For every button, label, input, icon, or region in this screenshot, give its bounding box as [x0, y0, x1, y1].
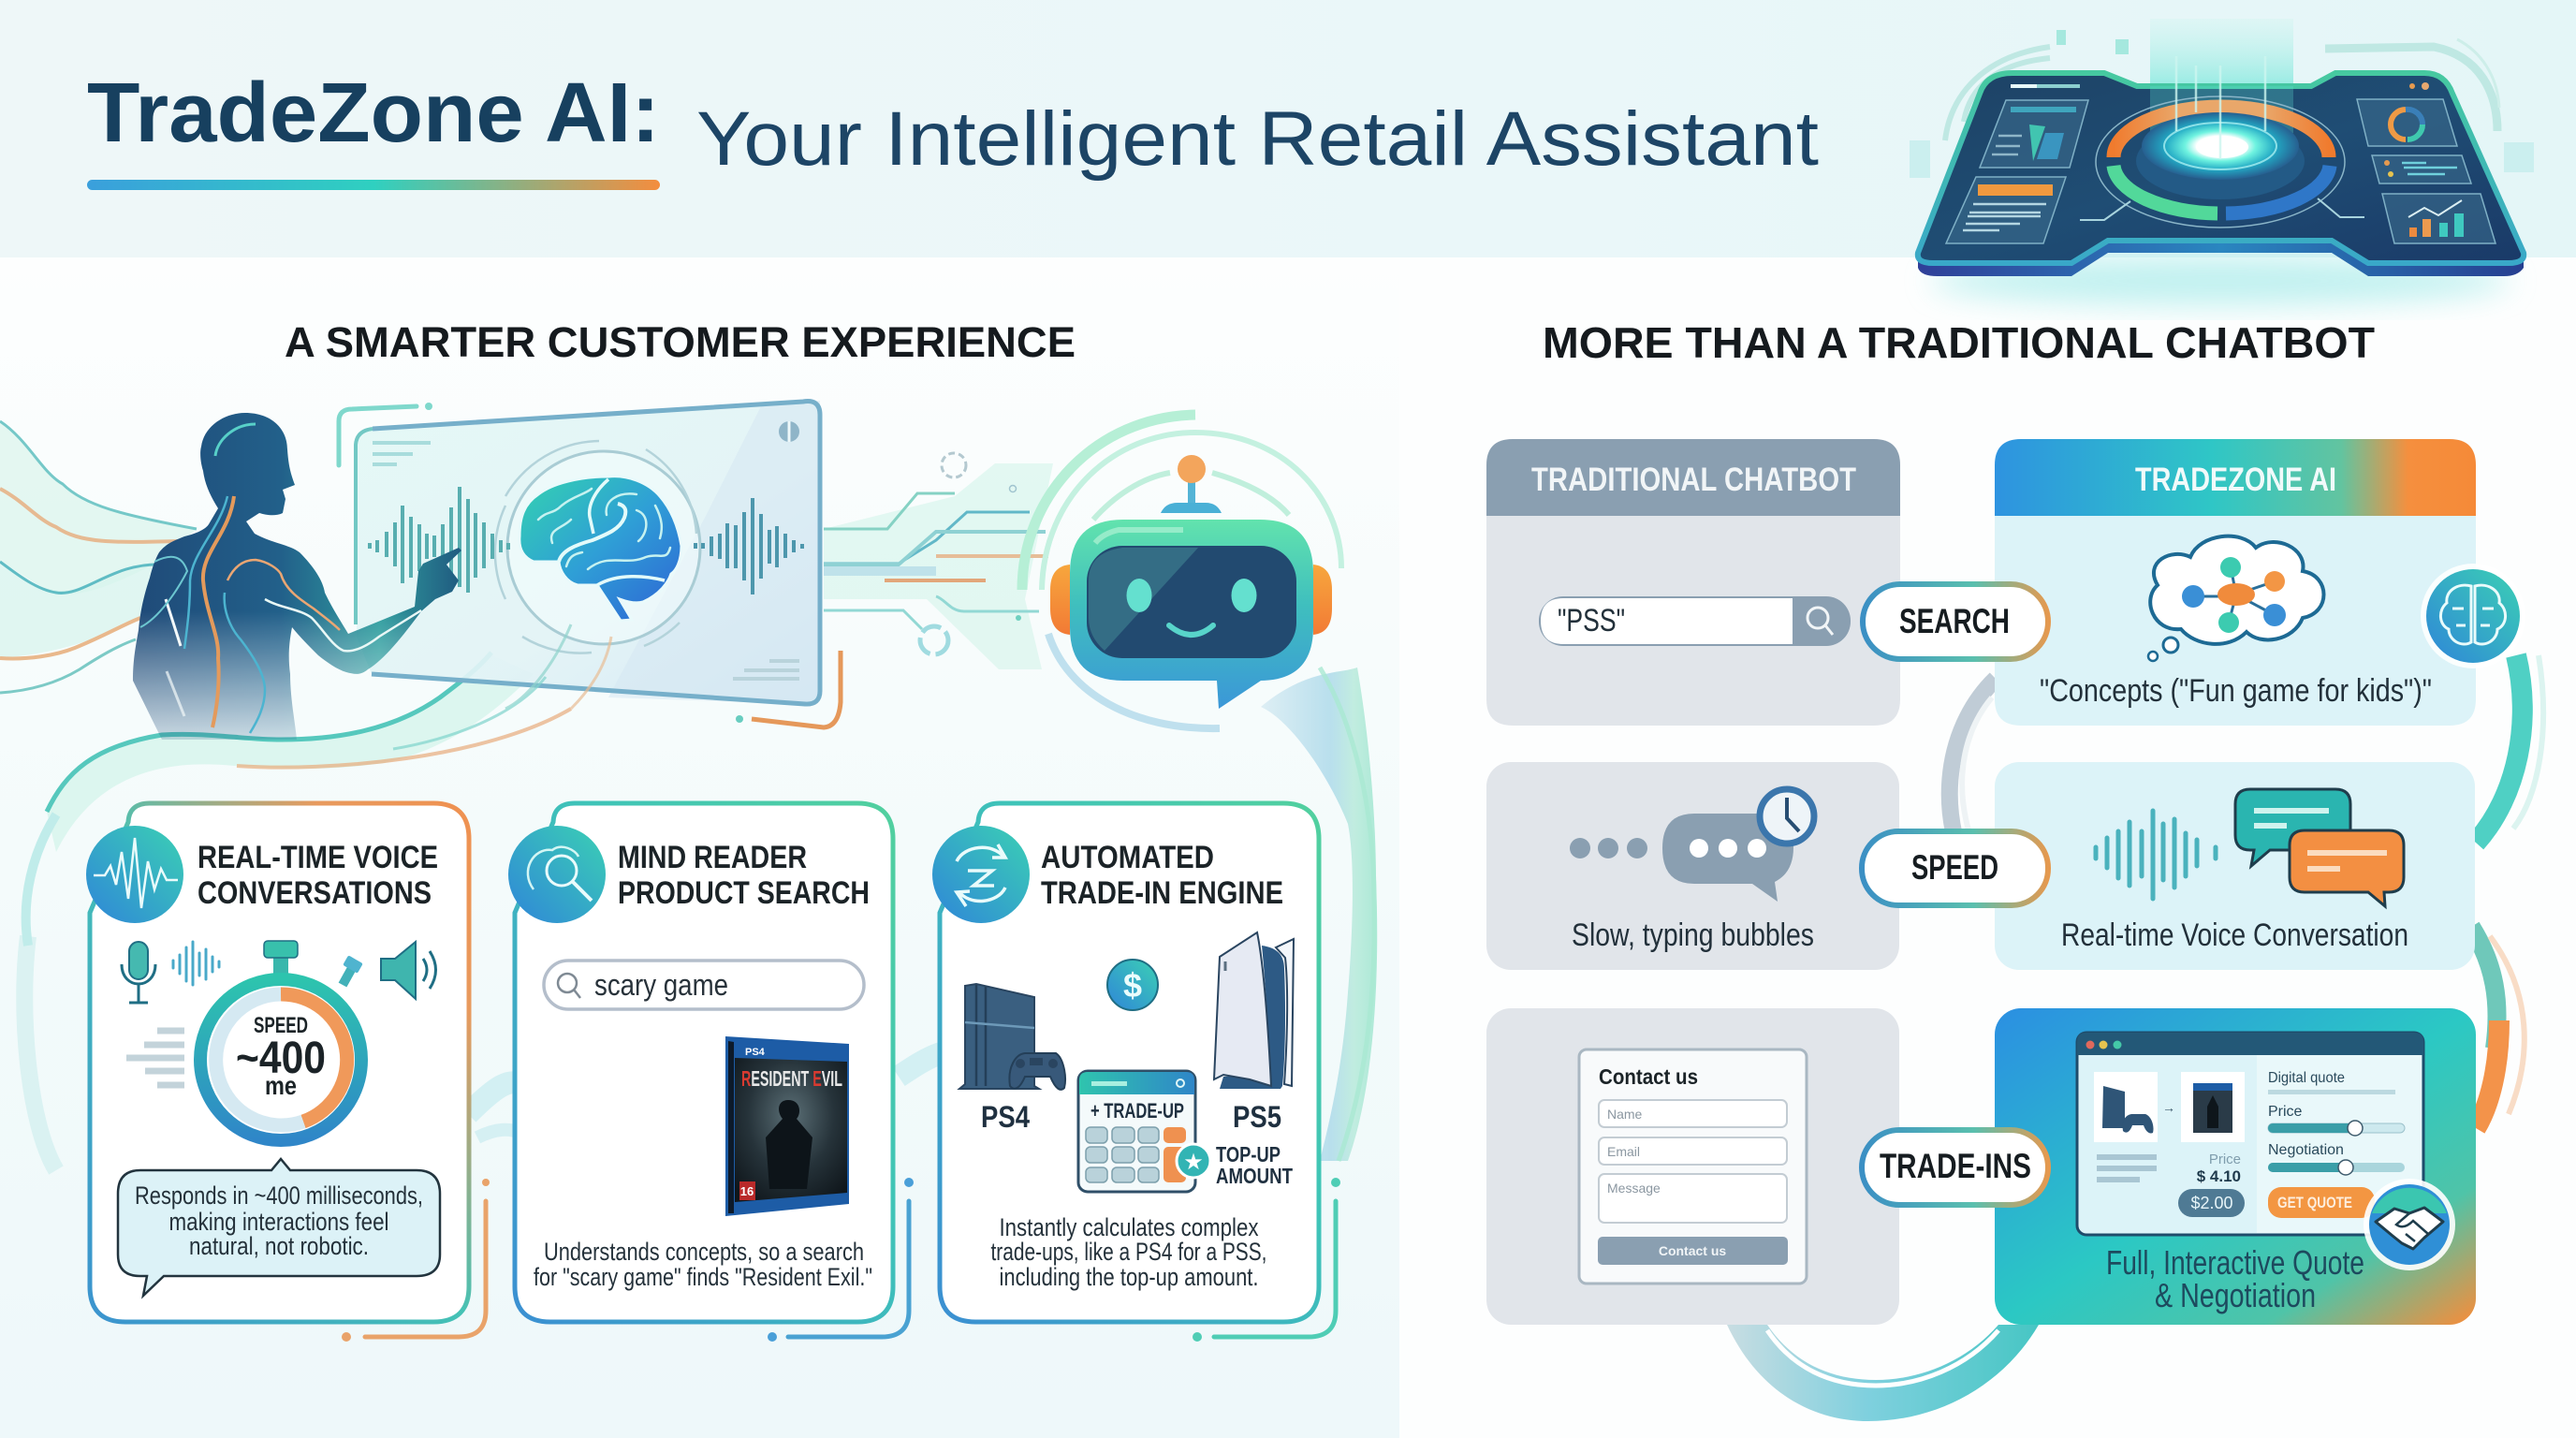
- card: mind reader product search: [508, 803, 914, 1342]
- icon: swap arrows: [932, 826, 1030, 923]
- comparison row 1: TradeZone AI concepts: [1995, 439, 2476, 726]
- callout speech bubble: Responds in ~400 milliseconds,: [135, 1181, 423, 1210]
- icon: speaker: [381, 942, 436, 999]
- background: right section: [1399, 257, 2576, 1438]
- comparison row 1: traditional chatbot search: [1486, 439, 1900, 726]
- calculator: trade-up: [1078, 1071, 1210, 1192]
- illustration: circuit lines linking panel to robot: [824, 453, 1053, 669]
- card heading: [1041, 840, 1283, 911]
- pill: speed: SPEED: [1911, 848, 1998, 887]
- card heading: PRODUCT SEARCH: [618, 875, 870, 911]
- pill: trade-ins: TRADE-INS: [1880, 1147, 2031, 1185]
- section heading: left: A SMARTER CUSTOMER EXPERIENCE: [285, 318, 1076, 366]
- card heading: AUTOMATED: [1041, 840, 1214, 875]
- calculator: trade-up: ★: [1183, 1150, 1204, 1175]
- icon: dollar coin: [1107, 960, 1158, 1010]
- caption: Real-time Voice Conversation: [2061, 917, 2408, 953]
- callout speech bubble: making interactions feel: [168, 1208, 389, 1236]
- icon: brain badge: [2421, 564, 2525, 668]
- title: Your Intelligent Retail Assistant: [696, 96, 1819, 182]
- icon: microphone: [122, 942, 155, 1003]
- pill: speed: [1862, 831, 2048, 905]
- pill: search: [1863, 584, 2048, 659]
- search bar "PSS": "PSS": [1558, 603, 1625, 638]
- card description: Instantly calculates complex: [1000, 1213, 1259, 1241]
- quote app window: $2.00: [2190, 1194, 2233, 1212]
- icon: voice waveform: [86, 826, 183, 923]
- contact form card: [1579, 1049, 1807, 1284]
- icon: dollar coin: $: [1123, 966, 1142, 1005]
- pill: search: SEARCH: [1899, 602, 2010, 640]
- title: TradeZone AI:: [87, 66, 660, 160]
- label top-up amount: TOP-UP: [1216, 1142, 1281, 1167]
- card description: [534, 1238, 872, 1291]
- column header: TradeZone AI: TRADEZONE AI: [2135, 462, 2336, 498]
- illustration: robot assistant: [1022, 415, 1341, 728]
- stopwatch gauge: SPEED: [254, 1013, 308, 1038]
- illustration: person silhouette: [133, 413, 461, 740]
- caption: Slow, typing bubbles: [1572, 917, 1814, 953]
- calculator: trade-up: + TRADE-UP: [1090, 1099, 1184, 1123]
- flowing ribbons behind left panel: [0, 421, 1377, 1170]
- header band: [0, 0, 2576, 257]
- illustration: holographic retail dashboard: [1910, 19, 2534, 305]
- quote app window: $ 4.10: [2197, 1167, 2241, 1185]
- card heading: [198, 840, 438, 911]
- background: left section: [0, 257, 1399, 1438]
- contact form card: Name: [1607, 1107, 1643, 1122]
- quote app window: GET QUOTE: [2277, 1194, 2352, 1211]
- column header: traditional chatbot: [1486, 439, 1900, 516]
- card heading: REAL-TIME VOICE: [198, 840, 438, 875]
- label top-up amount: AMOUNT: [1216, 1164, 1293, 1188]
- icon: orange chat bubble: [2290, 830, 2404, 906]
- card: real-time voice conversations: [86, 803, 490, 1342]
- icon: sound wave: [173, 942, 219, 985]
- label top-up amount: [1216, 1142, 1293, 1188]
- icon: handshake badge: [2364, 1179, 2455, 1270]
- title: [87, 66, 1819, 182]
- card description: [990, 1213, 1267, 1291]
- game box: Resident Evil: [725, 1036, 849, 1216]
- contact form card: Contact us: [1599, 1064, 1698, 1089]
- card heading: [618, 840, 870, 911]
- comparison row 3: contact form: [1486, 1008, 1899, 1325]
- stopwatch gauge: [200, 941, 363, 1140]
- pill: trade-ins: [1862, 1130, 2048, 1205]
- quote app window: Price: [2209, 1152, 2241, 1167]
- label PS4: PS4: [981, 1100, 1030, 1134]
- contact form card: Contact us: [1659, 1243, 1726, 1258]
- caption: Full, Interactive Quote: [2106, 1243, 2364, 1282]
- card heading: CONVERSATIONS: [198, 875, 432, 911]
- card description: trade-ups, like a PS4 for a PSS,: [990, 1238, 1267, 1266]
- card: automated trade-in engine: [932, 803, 1340, 1342]
- icon: teal chat bubble: [2235, 789, 2350, 866]
- contact form card: Email: [1607, 1144, 1640, 1159]
- game box: Resident Evil: PS4: [745, 1047, 766, 1058]
- label PS5: PS5: [1233, 1100, 1281, 1134]
- callout speech bubble: natural, not robotic.: [189, 1232, 369, 1260]
- game box: Resident Evil: 16: [740, 1184, 754, 1198]
- icon: PS4 console: [959, 984, 1065, 1090]
- card heading: MIND READER: [618, 840, 807, 875]
- icon: voice waveform: [2096, 811, 2216, 899]
- column header: TradeZone AI: [1995, 439, 2476, 516]
- comparison row 2: slow typing bubbles: [1486, 762, 1899, 970]
- search bar: [544, 961, 864, 1009]
- column header: traditional chatbot: TRADITIONAL CHATBOT: [1531, 462, 1856, 498]
- caption: & Negotiation: [2155, 1276, 2316, 1314]
- icon: brain: [520, 477, 681, 621]
- quote app window: Negotiation: [2268, 1142, 2344, 1158]
- stopwatch gauge: me: [265, 1071, 297, 1100]
- callout speech bubble: [118, 1159, 440, 1296]
- icon: search magnifier: [508, 826, 606, 923]
- card heading: TRADE-IN ENGINE: [1041, 875, 1283, 911]
- illustration: glass voice panel with brain: [237, 401, 841, 768]
- game box: Resident Evil: RESIDENT EVIL: [741, 1066, 842, 1091]
- icon: thought cloud with concept graph: [2148, 536, 2323, 661]
- stopwatch gauge: ~400: [236, 1034, 326, 1083]
- icon: typing bubble with clock: [1570, 789, 1814, 902]
- title underline: [87, 180, 660, 190]
- speed lines: [126, 1031, 184, 1085]
- search bar: scary game: [594, 968, 728, 1002]
- card description: Understands concepts, so a search: [544, 1238, 864, 1266]
- card description: for "scary game" finds "Resident Exil.": [534, 1263, 872, 1291]
- card description: including the top-up amount.: [1000, 1263, 1258, 1291]
- icon: PS5 console: [1214, 932, 1294, 1089]
- caption: [2106, 1243, 2364, 1314]
- search bar "PSS": [1539, 596, 1851, 646]
- quote app window: Price: [2268, 1104, 2303, 1120]
- comparison row 2: real-time voice: [1995, 762, 2475, 970]
- caption: "Concepts ("Fun game for kids")": [2040, 673, 2432, 709]
- connecting arcs behind comparison panels: [1727, 655, 2543, 1421]
- ribbons crossing the glass: [237, 624, 611, 768]
- comparison row 3: interactive quote panel: [1995, 1008, 2476, 1325]
- section heading: right: MORE THAN A TRADITIONAL CHATBOT: [1543, 318, 2375, 367]
- contact form card: Message: [1607, 1181, 1661, 1196]
- quote app window: →: [2162, 1100, 2175, 1115]
- quote app window: [2077, 1033, 2423, 1235]
- quote app window: Digital quote: [2268, 1070, 2345, 1086]
